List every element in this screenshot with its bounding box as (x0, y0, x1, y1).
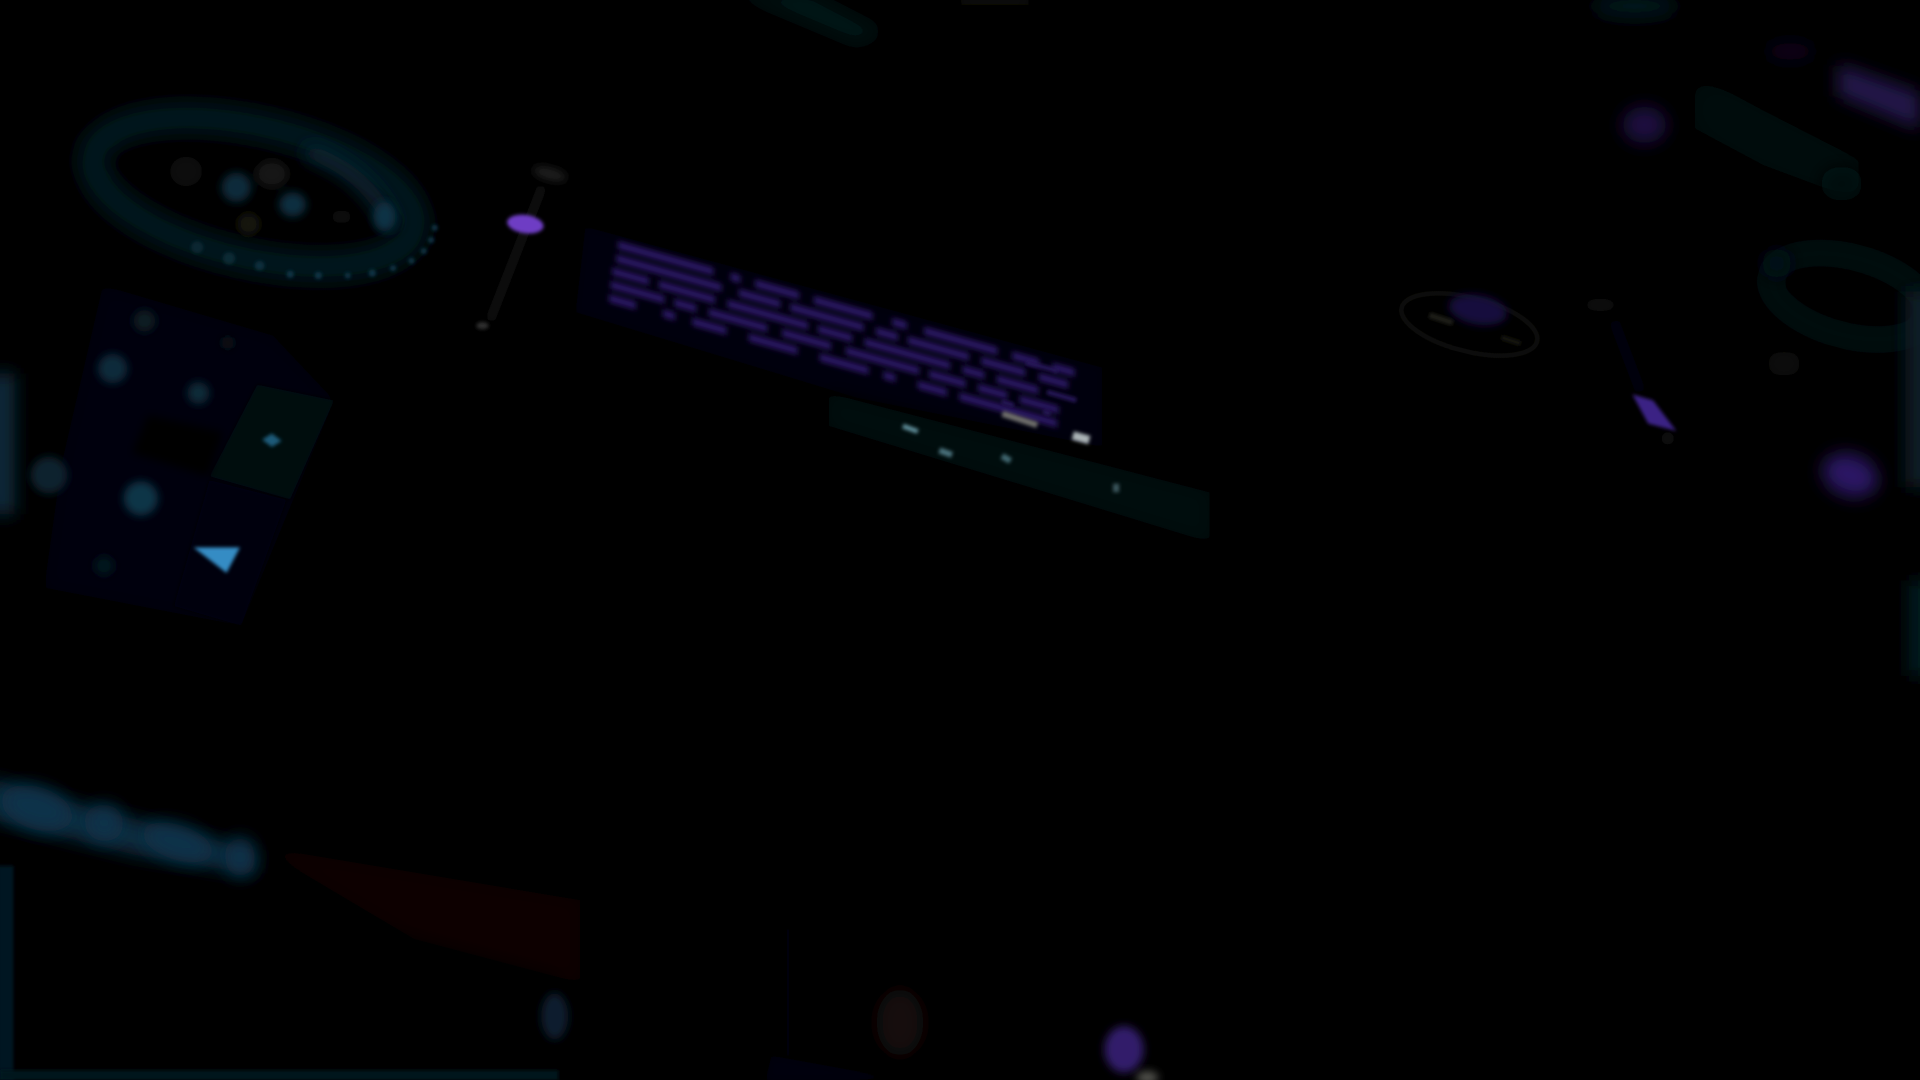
panel: bottom-left chart (0, 866, 568, 1080)
upper-right blurred cluster (1592, 0, 1920, 201)
panel: button grid (0, 285, 334, 626)
streak: blurred blobs (0, 777, 255, 877)
toolbar: labels (902, 411, 1119, 492)
grid: dark cutout (132, 415, 223, 476)
text block: trailing fragments (1002, 362, 1076, 414)
panel: toolbar (829, 393, 1210, 542)
icon: play triangle (193, 547, 240, 573)
grid: left-edge glow (0, 373, 15, 514)
gauge: ring tick dots (191, 225, 438, 279)
bottom centre nodes (765, 929, 1158, 1080)
grid: buttons (31, 310, 234, 576)
far-right blurred dial (1761, 238, 1920, 676)
right slider (1586, 299, 1676, 444)
bottom-left streak (0, 777, 580, 983)
vertical slider (476, 164, 568, 329)
panel: text block (576, 227, 1102, 447)
text block: blurred lines (609, 244, 1075, 427)
gauge: inner data points (170, 157, 396, 235)
radial gauge (79, 91, 438, 294)
small dial (1395, 281, 1544, 368)
icon: diamond (262, 433, 282, 447)
top centre streak (735, 0, 1029, 44)
